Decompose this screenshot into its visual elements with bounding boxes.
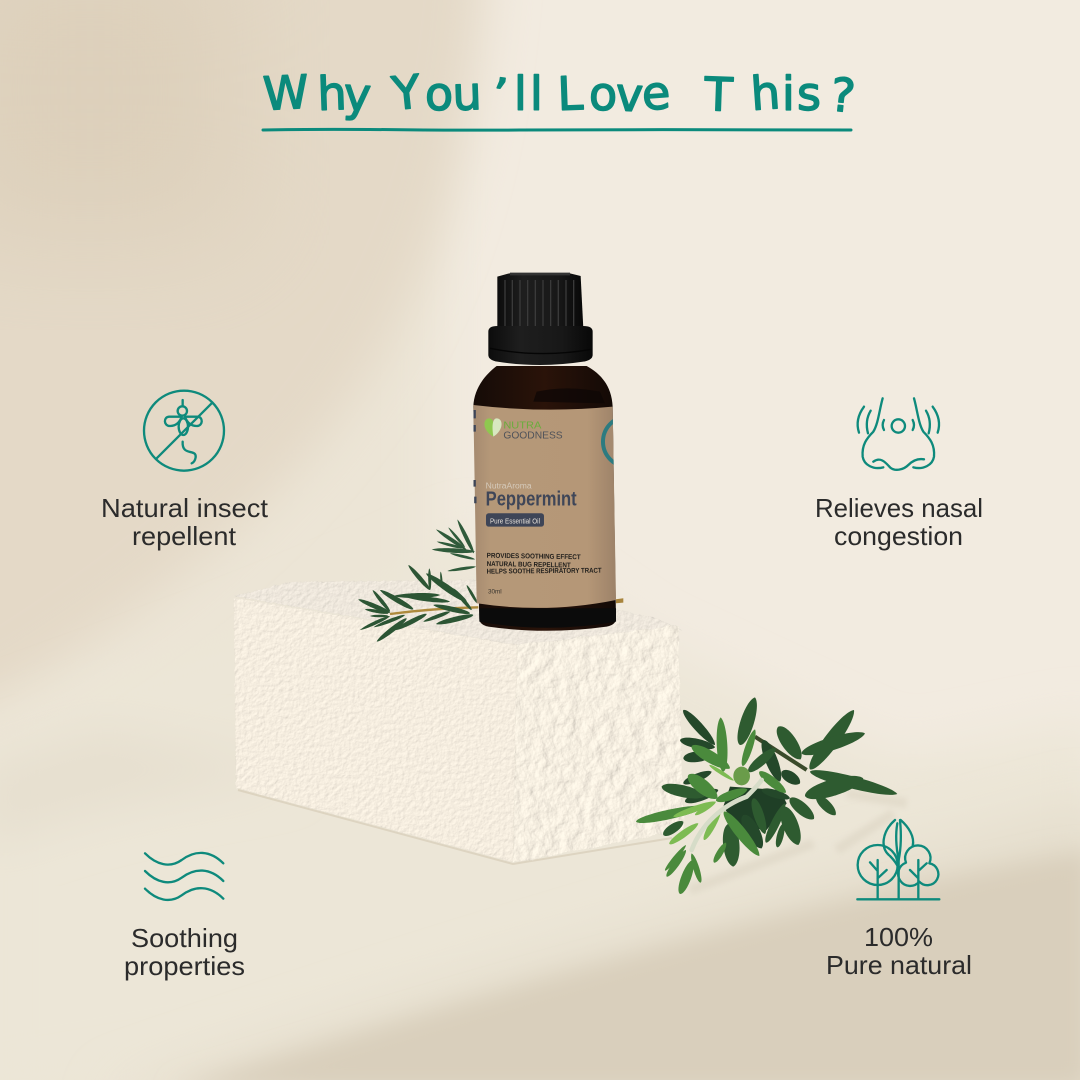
kraft label [473,405,616,608]
glass highlight [533,388,605,403]
bottle [473,272,624,631]
benefits on label: PROVIDES SOOTHING EFFECT [487,553,581,561]
upper rosemary sprig [357,518,479,644]
benefits on label [487,553,602,576]
bottle glass body [473,366,616,631]
label text: 100% [864,922,933,952]
product name [486,482,577,527]
label text: Natural insect [101,493,269,523]
benefits on label: HELPS SOOTHE RESPIRATORY TRACT [487,568,602,576]
feature: 100% pure natural: Pure natural [826,950,972,980]
lower rosemary sprig [635,695,907,896]
product name: Pure Essential Oil [490,516,540,525]
benefits on label: NATURAL BUG REPELLENT [487,561,571,569]
title: Why You'll Love This?: Why You’ll Love This? [262,64,858,123]
feature: relieves nasal congestion: congestion [834,521,963,551]
icon: crossed-out insect [144,391,224,471]
product name: Peppermint [486,488,577,510]
bottle cap [488,273,593,365]
block contact shadow [238,790,672,864]
logo text [503,420,563,441]
barcode ticks [471,410,479,503]
block front face [234,598,517,862]
block top face [234,580,682,645]
label text: Relieves nasal [815,493,983,523]
sprig shadow [690,793,907,890]
label text: Soothing [131,923,238,953]
feature: relieves nasal congestion [815,398,983,551]
logo text: NUTRA [503,420,541,431]
product name: NutraAroma [486,482,532,491]
feature: soothing properties [124,853,245,981]
teal seal [601,419,614,465]
logo heart [484,418,502,437]
icon: trees and leaf [857,820,939,899]
icon: nose [858,398,939,470]
feature: natural insect repellent: repellent [132,521,237,551]
icon: waves [145,853,223,900]
feature: natural insect repellent [101,391,269,551]
title underline [263,128,851,132]
logo text: GOODNESS [503,430,563,441]
stone block [234,580,684,864]
block right face [513,625,684,863]
feature: soothing properties: properties [124,951,245,981]
feature: 100% pure natural [826,820,972,980]
volume: 30ml [488,589,502,596]
